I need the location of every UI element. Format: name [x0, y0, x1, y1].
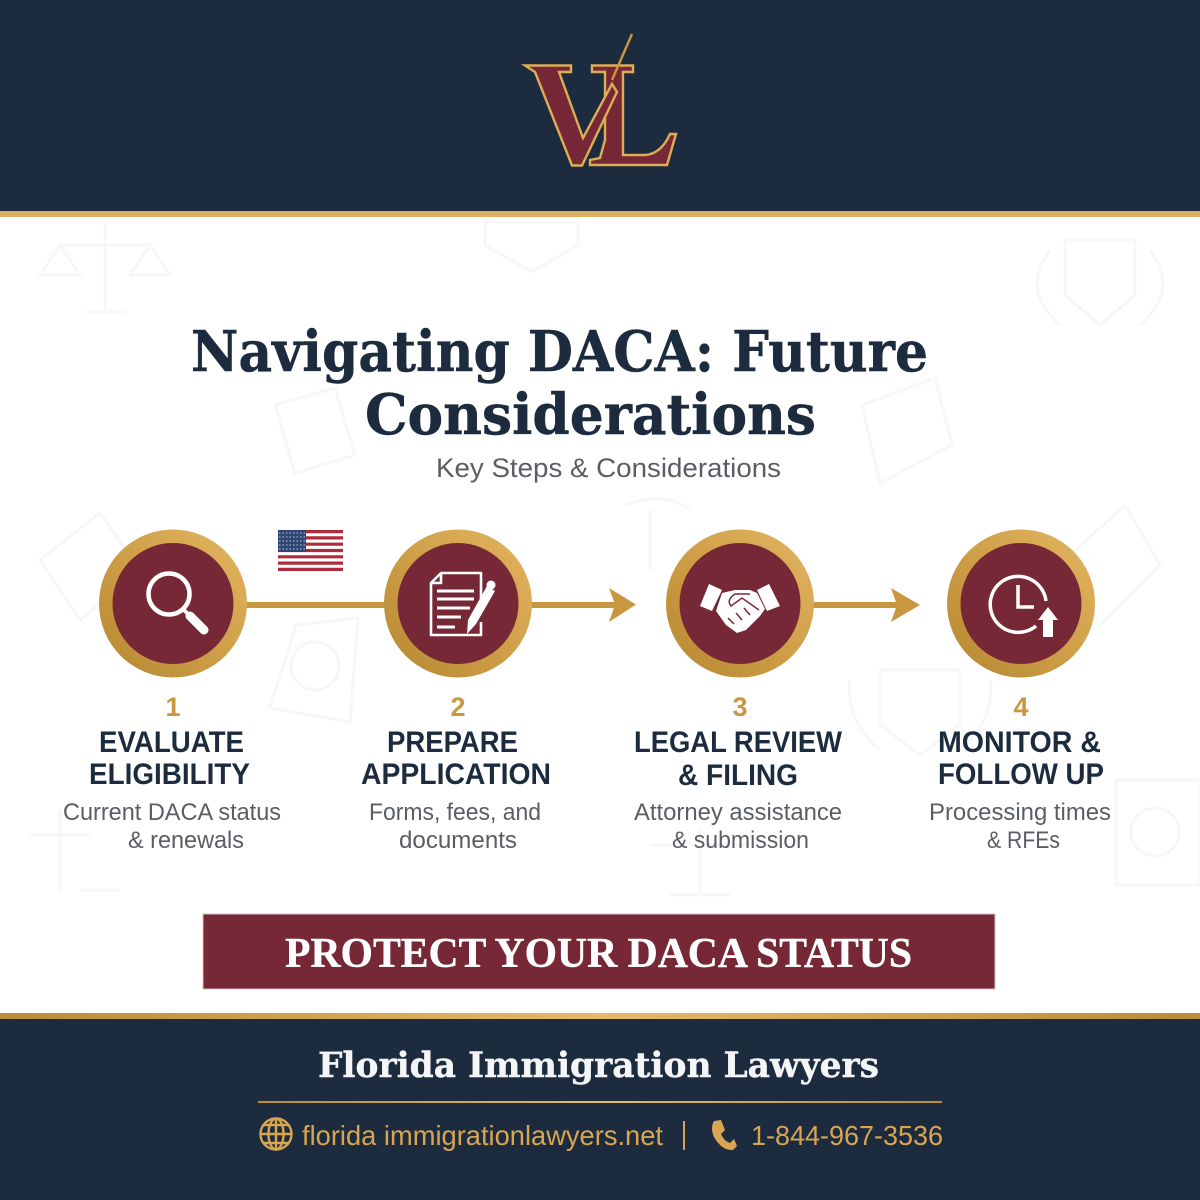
step 2 heading: PREPARE: [387, 726, 518, 759]
step 1: evaluate eligibility: [63, 530, 281, 854]
step 3 heading: [634, 726, 843, 792]
step 3: legal review and filing: [634, 530, 843, 854]
contact divider: [683, 1121, 685, 1150]
step 1 heading: ELIGIBILITY: [89, 758, 250, 791]
call-to-action banner: PROTECT YOUR DACA STATUS: [285, 931, 912, 977]
title: [191, 319, 928, 448]
step 3 description: [634, 799, 842, 854]
step 2 description: [369, 799, 541, 854]
faint watermark pattern: [30, 222, 1200, 895]
phone number: 1-844-967-3536: [751, 1120, 943, 1151]
icon: American flag: [278, 530, 343, 571]
step 4 heading: FOLLOW UP: [938, 758, 1104, 791]
step 4 description: Processing times: [929, 799, 1111, 826]
step 4 description: [929, 799, 1111, 854]
icon: clock with up arrow: [990, 576, 1058, 637]
website: florida immigrationlawyers.net: [302, 1120, 663, 1151]
step 3 badge: [666, 530, 814, 678]
logo letter L: [590, 66, 676, 165]
header band: [0, 0, 1200, 217]
step 1 heading: [89, 726, 250, 791]
step 1 description: & renewals: [128, 827, 244, 854]
footer band: [0, 1013, 1200, 1200]
step 2 description: Forms, fees, and: [369, 799, 541, 826]
step 4 heading: [938, 726, 1104, 791]
subtitle: Key Steps & Considerations: [436, 453, 781, 483]
step 1 number: 1: [165, 692, 181, 722]
firm name: Florida Immigration Lawyers: [318, 1045, 879, 1086]
icon: handshake: [700, 584, 780, 633]
icon: document and pen: [431, 573, 496, 635]
icon: magnifying glass: [148, 574, 204, 630]
step 3 description: & submission: [672, 827, 809, 854]
title: Navigating DACA: Future: [191, 319, 928, 385]
call-to-action banner: [203, 914, 995, 989]
step 2 heading: [361, 726, 551, 791]
step 2: prepare application: [361, 530, 551, 854]
logo: VL monogram: [525, 34, 676, 166]
step 3 heading: & FILING: [678, 759, 798, 792]
icon: globe: [260, 1118, 292, 1150]
step 4: monitor and follow up: [929, 530, 1111, 854]
step 4 heading: MONITOR &: [938, 726, 1101, 759]
step 1 description: [63, 799, 281, 854]
footer rule: [258, 1101, 942, 1103]
step 1 heading: EVALUATE: [99, 726, 244, 759]
step 2 heading: APPLICATION: [361, 758, 551, 791]
arrow step 3 to 4: [808, 588, 920, 622]
arrow step 2 to 3: [525, 588, 636, 622]
icon: phone: [712, 1120, 737, 1150]
connector line step 1 to 2: [240, 602, 390, 608]
step 3 heading: LEGAL REVIEW: [634, 726, 843, 759]
step 4 badge: [947, 530, 1095, 678]
step 2 description: documents: [399, 827, 517, 854]
step 1 description: Current DACA status: [63, 799, 281, 826]
step 2 number: 2: [450, 692, 466, 722]
logo pen stroke: [612, 34, 632, 80]
step 4 description: & RFEs: [987, 827, 1060, 854]
step 3 number: 3: [732, 692, 748, 722]
logo letter V: [525, 66, 617, 166]
step 4 number: 4: [1013, 692, 1029, 722]
step 2 badge: [384, 530, 532, 678]
title: Considerations: [365, 382, 816, 448]
step 3 description: Attorney assistance: [634, 799, 842, 826]
step 1 badge: [99, 530, 247, 678]
